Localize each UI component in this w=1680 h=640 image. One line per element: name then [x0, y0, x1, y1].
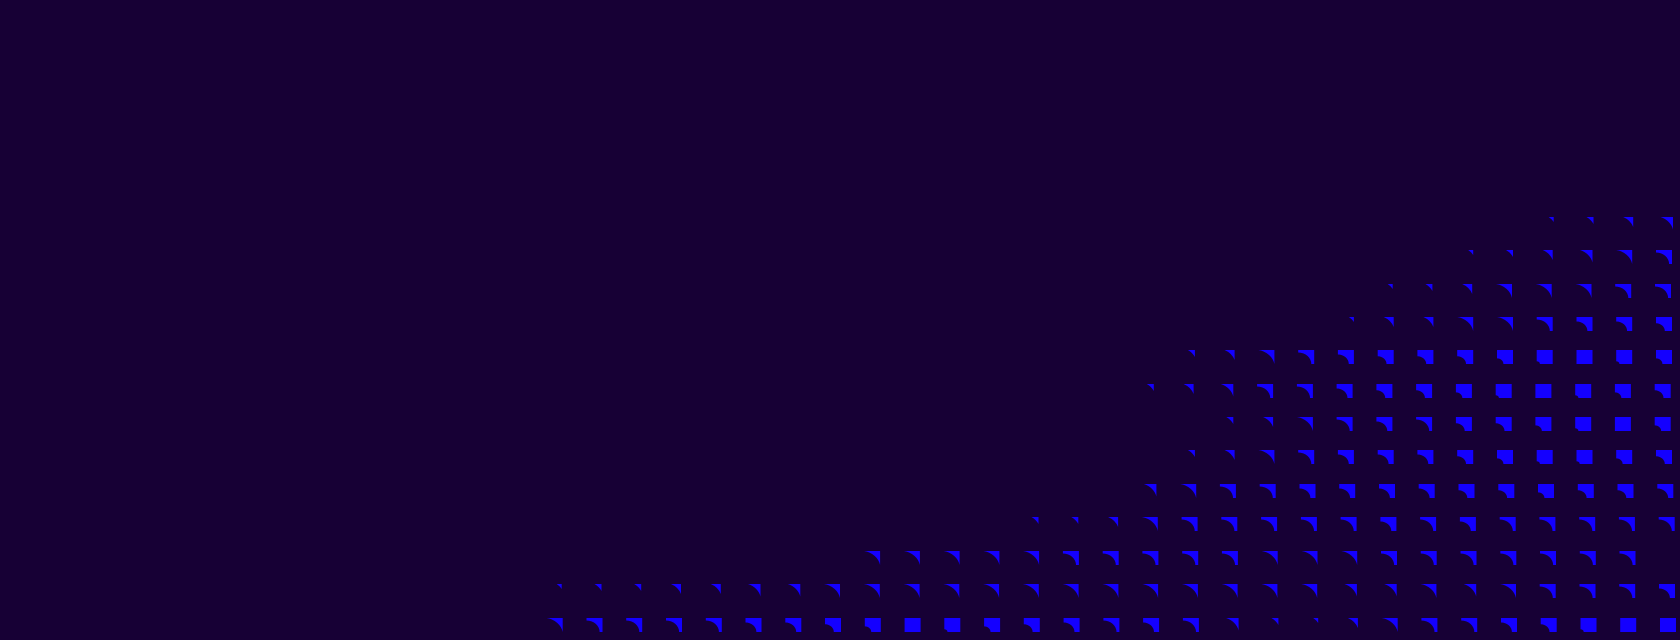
dot row 2 [1468, 250, 1672, 264]
dot row 6 [1147, 384, 1671, 398]
dot row 9 [1144, 484, 1673, 498]
dot row 8 [1188, 450, 1672, 464]
dot row 13 [547, 618, 1676, 632]
dot row 3 [1388, 284, 1671, 298]
dot row 4 [1349, 317, 1672, 331]
halftone dot grid [547, 217, 1676, 632]
dot row 12 [557, 584, 1675, 598]
dot row 1 [1549, 217, 1673, 230]
dot row 11 [864, 551, 1636, 565]
dot row 10 [1032, 517, 1675, 531]
dot row 7 [1226, 417, 1671, 431]
dot row 5 [1188, 350, 1672, 364]
